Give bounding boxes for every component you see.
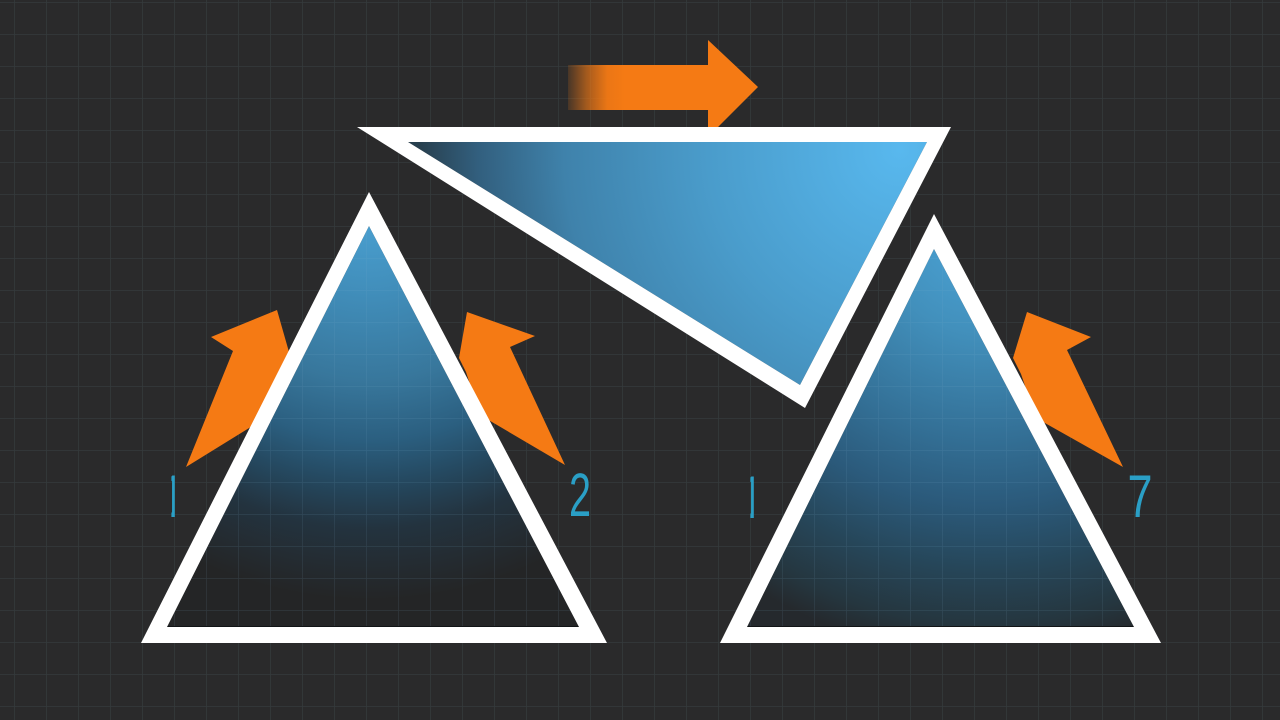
triangle: top inverted	[357, 127, 951, 408]
arrow: left triangle right side	[459, 312, 565, 465]
label: 2: 2	[569, 460, 591, 529]
triangle: bottom right	[720, 214, 1161, 643]
label: 1 left: 1	[163, 464, 183, 530]
arrow: right triangle right side	[1013, 312, 1123, 467]
arrow: left triangle left side	[186, 310, 289, 467]
triangle: bottom left	[141, 192, 607, 643]
label: 7: 7	[1127, 464, 1153, 531]
arrow: top motion arrow	[568, 40, 758, 137]
label: 1 center: 1	[742, 465, 762, 531]
